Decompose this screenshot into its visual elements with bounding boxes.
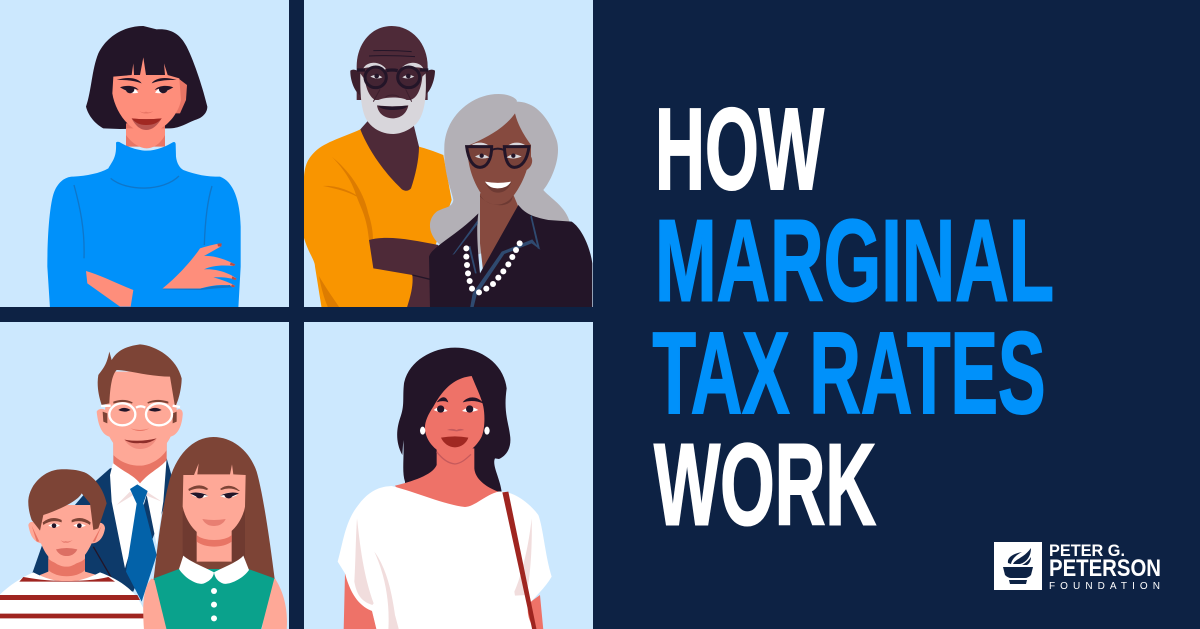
illustration: father, son and daughter bbox=[0, 344, 287, 629]
logo: Peter G. Peterson Foundation bbox=[994, 541, 1161, 592]
logo text: PETERSON: PETERSON bbox=[1049, 555, 1161, 582]
panel: woman in white top bbox=[304, 322, 593, 629]
woman with silver hair bbox=[429, 94, 592, 308]
title line: WORK: WORK bbox=[654, 420, 876, 550]
girl in green dress bbox=[143, 437, 287, 629]
boy in striped shirt bbox=[0, 469, 155, 629]
illustration: woman with bob haircut bbox=[47, 26, 241, 308]
title bbox=[652, 84, 1054, 550]
illustration: woman with long dark hair bbox=[338, 348, 552, 629]
panel: woman in blue sweater bbox=[0, 0, 289, 308]
panel: older couple bbox=[304, 0, 593, 308]
panel: family bbox=[0, 322, 289, 629]
father in navy suit bbox=[32, 344, 183, 602]
icon: torch bbox=[994, 542, 1042, 590]
logo text: PETER G.: PETER G. bbox=[1049, 541, 1125, 560]
man in orange sweater bbox=[304, 26, 452, 308]
title line: HOW: HOW bbox=[655, 84, 824, 214]
logo text: FOUNDATION: FOUNDATION bbox=[1049, 581, 1160, 592]
illustration: older couple with glasses bbox=[304, 26, 592, 308]
